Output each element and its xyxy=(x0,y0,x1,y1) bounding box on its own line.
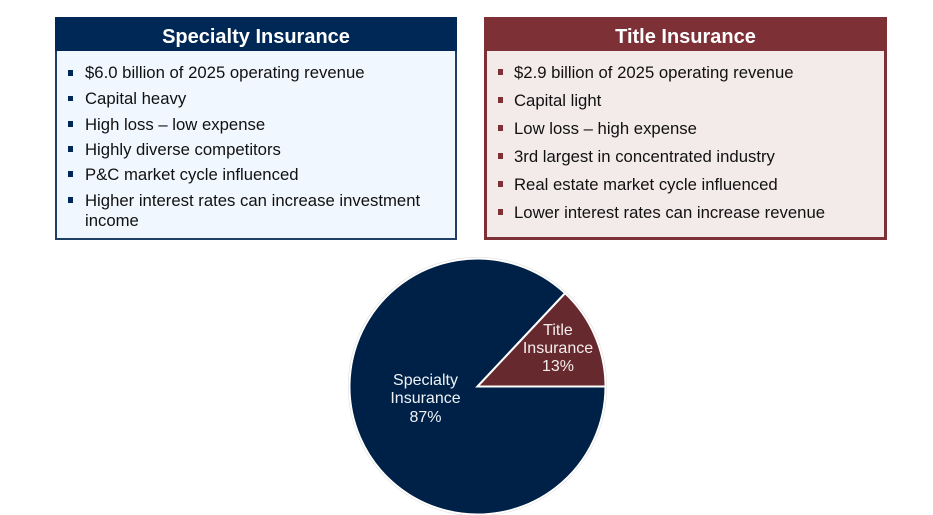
bullet list: title insurance: Capital light xyxy=(514,91,601,110)
slice: specialty insurance 87%: Insurance xyxy=(390,390,461,407)
heading: specialty insurance xyxy=(55,17,457,51)
bullet list: specialty insurance: High loss – low expense xyxy=(85,115,265,134)
slice: title insurance 13% xyxy=(478,293,606,386)
heading: title insurance xyxy=(484,17,887,51)
bullet list: specialty insurance: income xyxy=(85,211,139,230)
bullet list: title insurance: Low loss – high expense xyxy=(514,119,697,138)
bullet list: title insurance: 3rd largest in concentrated industry xyxy=(514,147,775,166)
bullet list: title insurance xyxy=(498,63,825,222)
heading: specialty insurance: Specialty Insurance xyxy=(162,26,350,48)
slice: title insurance 13%: Insurance xyxy=(523,340,593,357)
bullet list: specialty insurance: Highly diverse competitors xyxy=(85,140,281,159)
bullet list: title insurance: Real estate market cycle influenced xyxy=(514,175,778,194)
bullet list: specialty insurance: $6.0 billion of 2025 operating revenue xyxy=(85,63,365,82)
slice: title insurance 13%: Title xyxy=(543,322,573,339)
bullet list: title insurance: $2.9 billion of 2025 operating revenue xyxy=(514,63,794,82)
bullet list: specialty insurance xyxy=(68,63,420,230)
bullet list: specialty insurance: Higher interest rates can increase investment xyxy=(85,191,420,210)
bullet list: title insurance: Lower interest rates can increase revenue xyxy=(514,203,825,222)
heading: title insurance: Title Insurance xyxy=(615,26,756,48)
panel: specialty insurance xyxy=(55,17,457,240)
panel: title insurance xyxy=(484,17,887,240)
slice: specialty insurance 87%: Specialty xyxy=(393,372,458,389)
bullet list: specialty insurance: Capital heavy xyxy=(85,89,186,108)
slice: specialty insurance 87% xyxy=(348,258,606,515)
slice: title insurance 13%: 13% xyxy=(542,358,574,375)
slice: specialty insurance 87%: 87% xyxy=(409,409,442,426)
bullet list: specialty insurance: P&C market cycle influenced xyxy=(85,165,299,184)
